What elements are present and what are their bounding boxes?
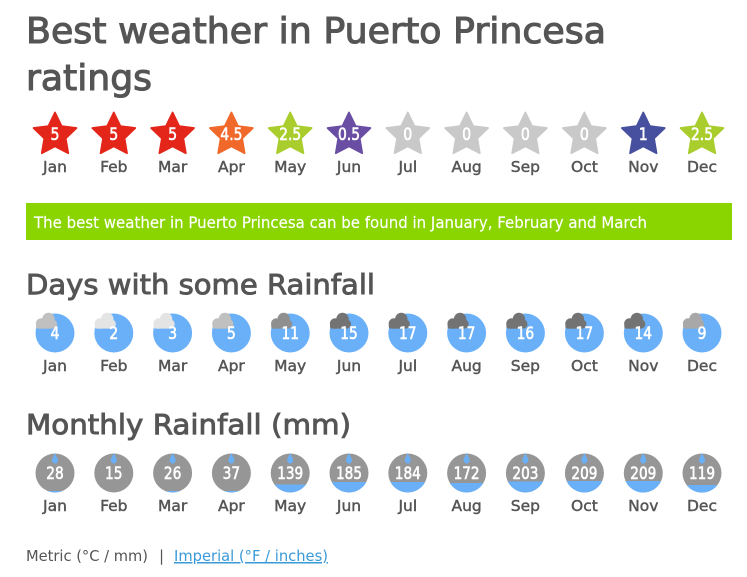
star: May 2.5: 2.5	[279, 125, 301, 144]
star: April 4.5	[210, 112, 253, 176]
star: January 5: 5	[50, 125, 60, 144]
title: ratings	[26, 58, 152, 99]
panel: star ratings by month	[34, 112, 723, 176]
star: April 4.5: Apr	[218, 158, 245, 176]
icon: December 9 days: Dec	[687, 357, 717, 375]
icon: August 17 days	[447, 313, 486, 375]
icon: November 14 days: Nov	[628, 357, 658, 375]
star: February 5	[92, 112, 135, 176]
star: September 0	[504, 112, 547, 176]
icon: March 26 mm	[153, 453, 192, 515]
star: February 5: Feb	[100, 158, 128, 176]
star: October 0	[563, 112, 606, 176]
icon: October 209 mm	[565, 453, 604, 515]
icon: February 15 mm: 15	[105, 464, 123, 483]
star: September 0: Sep	[511, 158, 540, 176]
star: December 2.5	[681, 112, 723, 176]
icon: September 16 days	[506, 313, 545, 375]
star: August 0	[445, 112, 488, 176]
icon: June 185 mm: 185	[336, 464, 362, 483]
callout: best weather banner	[26, 203, 732, 240]
icon: March 26 mm: 26	[164, 464, 181, 483]
icon: October 209 mm: 209	[571, 464, 597, 483]
icon: January 28 mm: 28	[46, 464, 64, 483]
icon: January 4 days: Jan	[42, 357, 67, 375]
panel: rainfall days by month	[36, 313, 722, 375]
icon: June 15 days: Jun	[336, 357, 361, 375]
icon: February 2 days: 2	[109, 324, 118, 343]
icon: November 209 mm: 209	[630, 464, 656, 483]
icon: June 185 mm: Jun	[336, 497, 361, 515]
callout: best weather banner: The best weather in Puerto Princesa can be found in January, February and March	[33, 213, 647, 232]
icon: August 172 mm: 172	[454, 464, 480, 483]
icon: May 11 days	[271, 313, 310, 375]
star: April 4.5: 4.5	[220, 125, 242, 144]
icon: January 28 mm: Jan	[42, 497, 67, 515]
icon: February 2 days: Feb	[100, 357, 128, 375]
star: November 1: Nov	[628, 158, 658, 176]
icon: December 9 days: 9	[698, 324, 706, 343]
icon: August 17 days: Aug	[451, 357, 482, 375]
icon: May 11 days: 11	[281, 324, 299, 343]
footer: unit switch: Imperial (°F / inches)	[174, 547, 328, 565]
star: September 0: 0	[521, 125, 530, 144]
icon: November 209 mm	[624, 453, 663, 515]
icon: February 15 mm: Feb	[100, 497, 128, 515]
icon: January 28 mm	[36, 453, 74, 515]
star: May 2.5: May	[274, 158, 306, 176]
icon: April 37 mm: 37	[223, 464, 240, 483]
footer: unit switch: |	[159, 547, 164, 565]
icon: December 119 mm: Dec	[687, 497, 717, 515]
icon: December 119 mm	[682, 453, 722, 515]
icon: August 17 days: 17	[458, 324, 475, 343]
icon: April 5 days: 5	[227, 324, 236, 343]
panel: monthly rainfall by month	[36, 453, 722, 515]
icon: December 9 days	[682, 313, 722, 375]
star: March 5: Mar	[158, 158, 188, 176]
icon: February 15 mm	[94, 453, 133, 515]
star: July 0	[386, 112, 429, 176]
icon: November 209 mm: Nov	[628, 497, 658, 515]
icon: October 17 days: 17	[576, 324, 593, 343]
footer: unit switch: Metric (°C / mm)	[26, 547, 148, 565]
icon: July 17 days: 17	[399, 324, 417, 343]
icon: December 119 mm: 119	[689, 464, 715, 483]
icon: March 3 days	[153, 313, 192, 375]
star: May 2.5	[269, 112, 312, 176]
icon: November 14 days: 14	[635, 324, 652, 343]
star: February 5: 5	[109, 125, 118, 144]
icon: May 139 mm: May	[274, 497, 306, 515]
star: October 0: 0	[580, 125, 589, 144]
star: March 5: 5	[168, 125, 177, 144]
icon: May 139 mm	[271, 453, 310, 515]
icon: March 3 days: Mar	[158, 357, 188, 375]
icon: April 37 mm: Apr	[218, 497, 245, 515]
star: July 0: Jul	[397, 158, 417, 176]
star: August 0: 0	[462, 125, 471, 144]
title	[26, 11, 606, 99]
icon: April 5 days	[212, 313, 251, 375]
icon: July 184 mm: 184	[395, 464, 421, 483]
icon: February 2 days	[94, 313, 133, 375]
icon: January 4 days	[36, 313, 74, 375]
star: October 0: Oct	[571, 158, 598, 176]
star: June 0.5	[328, 112, 370, 176]
icon: October 209 mm: Oct	[571, 497, 598, 515]
icon: August 172 mm	[447, 453, 486, 515]
star: March 5	[151, 112, 194, 176]
icon: November 14 days	[624, 313, 663, 375]
icon: October 17 days: Oct	[571, 357, 598, 375]
title: Best weather in Puerto Princesa	[26, 11, 606, 52]
icon: September 203 mm: 203	[512, 464, 538, 483]
icon: September 16 days: 16	[517, 324, 534, 343]
star: December 2.5: Dec	[687, 158, 717, 176]
icon: May 11 days: May	[274, 357, 306, 375]
icon: June 185 mm	[330, 453, 368, 515]
icon: July 184 mm	[388, 453, 427, 515]
icon: January 4 days: 4	[50, 324, 60, 343]
icon: May 139 mm: 139	[277, 464, 303, 483]
star: January 5: Jan	[42, 158, 67, 176]
icon: August 172 mm: Aug	[451, 497, 482, 515]
icon: September 16 days: Sep	[511, 357, 540, 375]
star: November 1	[622, 112, 665, 176]
icon: March 26 mm: Mar	[158, 497, 188, 515]
icon: April 5 days: Apr	[218, 357, 245, 375]
footer: unit switch	[26, 547, 328, 565]
star: June 0.5: Jun	[336, 158, 361, 176]
star: August 0: Aug	[451, 158, 482, 176]
heading: monthly rainfall: Monthly Rainfall (mm)	[26, 408, 351, 441]
star: December 2.5: 2.5	[691, 125, 713, 144]
icon: October 17 days	[565, 313, 604, 375]
icon: April 37 mm	[212, 453, 251, 515]
star: July 0: 0	[403, 125, 412, 144]
icon: July 184 mm: Jul	[397, 497, 417, 515]
icon: July 17 days	[388, 313, 427, 375]
icon: June 15 days: 15	[340, 324, 358, 343]
icon: March 3 days: 3	[168, 324, 177, 343]
icon: September 203 mm	[506, 453, 545, 515]
icon: July 17 days: Jul	[397, 357, 417, 375]
star: November 1: 1	[639, 125, 648, 144]
icon: June 15 days	[330, 313, 368, 375]
heading: days with some rainfall: Days with some Rainfall	[26, 268, 375, 301]
icon: September 203 mm: Sep	[511, 497, 540, 515]
star: January 5	[34, 112, 76, 176]
star: June 0.5: 0.5	[338, 125, 360, 144]
